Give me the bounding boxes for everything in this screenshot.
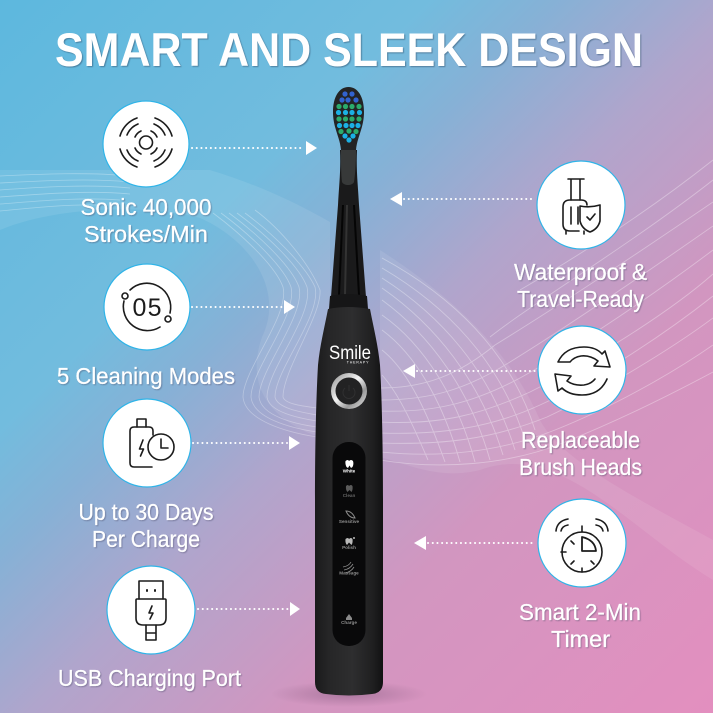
icon: alarm clock	[538, 499, 626, 587]
arrow	[192, 300, 295, 314]
mode: charge: Charge	[341, 620, 357, 625]
feature: usb charging	[58, 566, 300, 691]
brush head	[333, 87, 364, 150]
label: Timer	[551, 626, 610, 652]
icon: sound waves	[103, 101, 189, 187]
mode: sensitive: Sensitive	[339, 519, 360, 524]
mode: clean: Clean	[343, 493, 355, 498]
icon: 05 dial: 05	[132, 294, 162, 322]
feature: waterproof	[390, 161, 647, 312]
mode: polish	[342, 537, 356, 550]
label	[519, 427, 642, 480]
arrow	[193, 436, 300, 450]
brush neck	[331, 150, 366, 297]
arrow	[198, 602, 300, 616]
feature: sonic strokes	[80, 101, 317, 247]
mode: massage	[339, 562, 359, 576]
icon: battery and clock	[103, 399, 191, 487]
mode: massage: Massage	[339, 570, 359, 576]
label	[519, 599, 641, 652]
mode: polish: Polish	[342, 545, 356, 550]
label: 5 Cleaning Modes	[57, 363, 235, 389]
collar	[329, 294, 368, 309]
floor shadow	[271, 681, 427, 707]
mode: charge	[341, 614, 357, 625]
label: Sonic 40,000	[80, 194, 212, 220]
icon: usb plug	[107, 566, 195, 654]
icon: 05 dial	[104, 264, 190, 350]
label	[514, 259, 647, 312]
label: USB Charging Port	[58, 665, 242, 691]
feature: battery life	[78, 399, 300, 552]
mode: white	[343, 460, 356, 474]
label: Per Charge	[92, 526, 200, 552]
arrow	[192, 141, 317, 155]
label: Travel-Ready	[517, 286, 644, 312]
icon: luggage with shield	[537, 161, 625, 249]
feature: replaceable heads	[403, 326, 642, 480]
label	[80, 194, 212, 247]
label: Strokes/Min	[84, 221, 208, 247]
mode: white: White	[343, 468, 356, 474]
mode: clean	[343, 485, 355, 498]
label: Smart 2-Min	[519, 599, 641, 625]
title: SMART AND SLEEK DESIGN	[55, 23, 643, 76]
arrow	[390, 192, 535, 206]
label: Up to 30 Days	[78, 499, 214, 525]
label: Waterproof &	[514, 259, 647, 285]
handle	[315, 307, 383, 696]
mode panel	[332, 442, 366, 646]
label	[78, 499, 214, 552]
mode: sensitive	[339, 511, 360, 524]
feature: timer	[414, 499, 641, 652]
arrow	[403, 364, 535, 378]
label: Replaceable	[521, 427, 640, 453]
toothbrush	[271, 87, 427, 707]
logo: THERAPY	[347, 360, 369, 364]
icon: refresh arrows	[538, 326, 626, 414]
feature: cleaning modes	[57, 264, 295, 389]
arrow	[414, 536, 535, 550]
logo: Smile	[329, 343, 371, 364]
power ring	[331, 373, 367, 409]
label: Brush Heads	[519, 454, 642, 480]
bristles	[336, 91, 362, 143]
